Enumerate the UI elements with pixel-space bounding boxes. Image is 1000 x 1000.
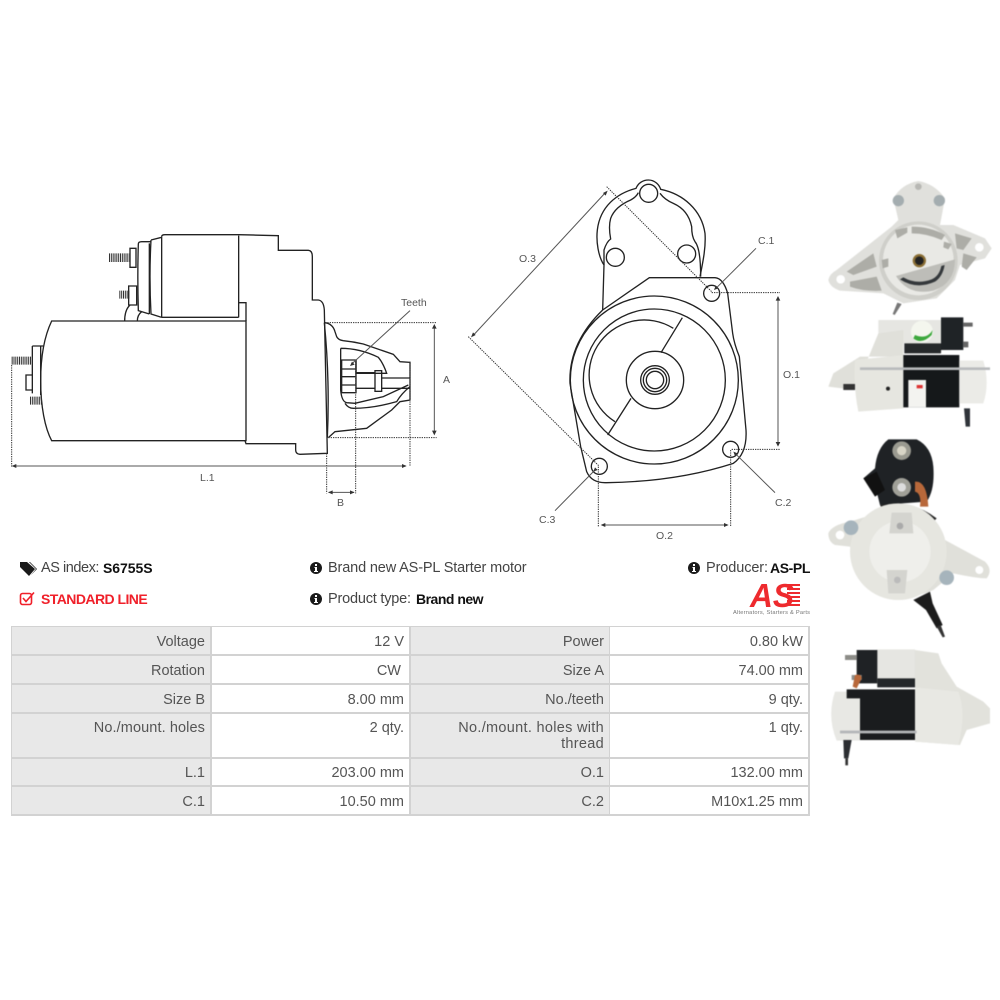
- text: Brand new: [416, 591, 483, 607]
- icon: red checkbox: [20, 592, 34, 604]
- dimension labels: O.3: [519, 253, 536, 265]
- dimension labels: A: [443, 374, 450, 386]
- text: AS index: [41, 560, 153, 576]
- photo: starter rear view: [828, 439, 990, 637]
- text: producer: [706, 560, 810, 576]
- icon: info circle one: [310, 562, 322, 574]
- text: AS index: AS index:: [41, 560, 99, 576]
- text: brand new starter motor: Brand new AS-PL Starter motor: [328, 560, 526, 576]
- text: producer: Producer:: [706, 560, 768, 576]
- specifications table: 74.00 mm: [739, 663, 803, 679]
- logo: AS-PL: AS: [749, 577, 794, 614]
- specifications table: Power: [563, 634, 604, 650]
- text: standard line: STANDARD LINE: [41, 591, 147, 607]
- specifications table: Size B: [163, 692, 205, 708]
- specifications table: 8.00 mm: [348, 692, 404, 708]
- front view technical drawing: [570, 180, 746, 483]
- specifications table: C.1: [182, 794, 205, 810]
- dimension labels: L.1: [200, 472, 215, 484]
- text: product type: Product type:: [328, 591, 411, 607]
- specifications table: No./teeth: [545, 692, 604, 708]
- specifications table: 0.80 kW: [750, 634, 803, 650]
- icon: info circle three: [688, 562, 700, 574]
- specifications table: 1 qty.: [769, 720, 803, 736]
- side view dimensions: [12, 323, 437, 493]
- front view dimensions: [468, 187, 781, 527]
- dimension labels: O.1: [783, 369, 800, 381]
- specifications table: M10x1.25 mm: [711, 794, 803, 810]
- specifications table: O.1: [581, 765, 604, 781]
- dimension labels: O.2: [656, 530, 673, 542]
- specifications table: [11, 626, 810, 816]
- dimension labels: Teeth: [401, 297, 427, 309]
- photo: starter front view: [828, 181, 992, 315]
- specifications table: C.2: [581, 794, 604, 810]
- logo: AS-PL: Alternators, Starters & Parts: [733, 610, 810, 616]
- dimension labels: C.3: [539, 514, 556, 526]
- specifications table: Size A: [563, 663, 604, 679]
- text: AS-PL: [770, 560, 810, 576]
- text: product type: [328, 591, 484, 607]
- photo: starter side view two: [831, 649, 990, 765]
- specifications table: Rotation: [151, 663, 205, 679]
- specifications table: No./mount. holes with: [458, 720, 604, 736]
- specifications table: 12 V: [374, 634, 404, 650]
- specifications table: 203.00 mm: [331, 765, 404, 781]
- specifications table: Voltage: [157, 634, 205, 650]
- specifications table: L.1: [185, 765, 205, 781]
- logo: AS-PL: [733, 577, 810, 616]
- dimension labels: C.2: [775, 497, 792, 509]
- icon: info circle two: [310, 593, 322, 605]
- dimension labels: C.1: [758, 235, 774, 247]
- photo: starter side view one: [828, 317, 990, 427]
- dimension labels: B: [337, 497, 344, 509]
- specifications table: 9 qty.: [769, 692, 803, 708]
- specifications table: No./mount. holes: [94, 720, 205, 736]
- specifications table: thread: [561, 736, 604, 752]
- specifications table: 10.50 mm: [340, 794, 404, 810]
- dimension labels: [200, 235, 800, 542]
- specifications table: 132.00 mm: [730, 765, 803, 781]
- icon: tags: [20, 562, 37, 576]
- specifications table: 2 qty.: [370, 720, 404, 736]
- text: S6755S: [103, 560, 153, 576]
- specifications table: CW: [377, 663, 401, 679]
